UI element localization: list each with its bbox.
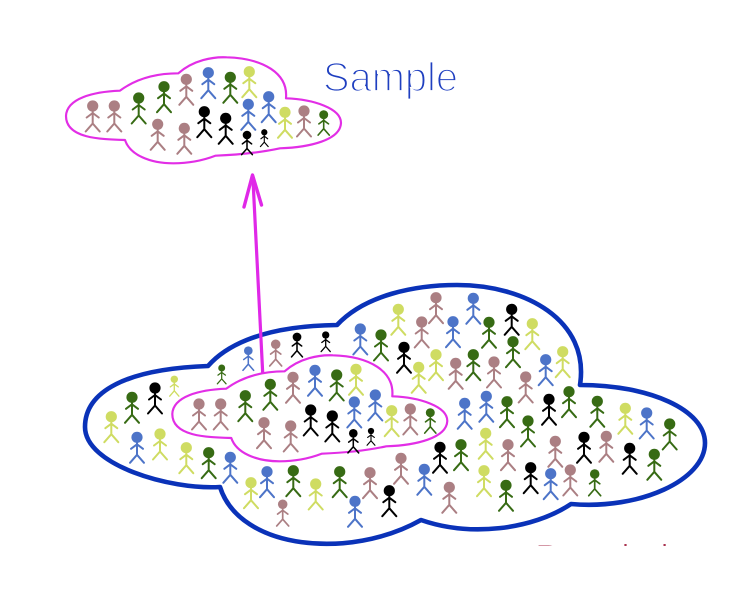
- inner cloud: sample drawn from population: [172, 355, 447, 461]
- heading: Sample: Sample: [323, 54, 458, 100]
- sample cloud: [66, 57, 341, 163]
- arrow from population subset to sample: [244, 175, 263, 373]
- sample outline: [66, 57, 341, 163]
- population outline: [85, 285, 705, 544]
- population cloud: [85, 285, 705, 544]
- sample people: [86, 66, 329, 155]
- inner cloud outline: [172, 355, 447, 461]
- inner cloud people: [192, 364, 436, 453]
- population people: [104, 292, 677, 527]
- heading: Population, cropped at the bottom edge: Population: [535, 538, 710, 579]
